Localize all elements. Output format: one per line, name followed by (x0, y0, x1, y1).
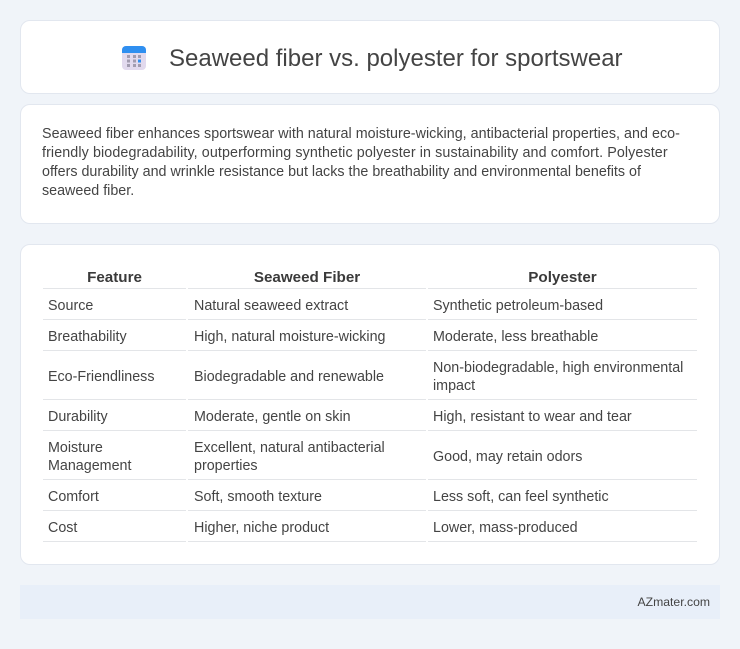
comparison table: Seaweed Fiber (254, 269, 360, 286)
comparison table: Biodegradable and renewable (194, 369, 384, 385)
comparison table (43, 269, 697, 542)
comparison table: Natural seaweed extract (194, 298, 348, 314)
comparison table: Moderate, gentle on skin (194, 409, 351, 425)
comparison table: properties (194, 458, 258, 474)
comparison table: Eco-Friendliness (48, 369, 154, 385)
comparison table: Management (48, 458, 131, 474)
summary text: seaweed fiber. (42, 183, 134, 199)
panel: title card (20, 20, 720, 94)
comparison table: Higher, niche product (194, 520, 329, 536)
comparison table: Feature (87, 269, 142, 286)
summary text (42, 126, 680, 199)
comparison table: High, resistant to wear and tear (433, 409, 632, 425)
comparison table: Comfort (48, 489, 99, 505)
comparison table: Good, may retain odors (433, 449, 582, 465)
comparison table: High, natural moisture-wicking (194, 329, 386, 345)
comparison table: Less soft, can feel synthetic (433, 489, 609, 505)
comparison table: Polyester (528, 269, 597, 286)
summary text: friendly biodegradability, outperforming synthetic polyester in sustainability and comfort. Polyester (42, 145, 668, 161)
summary text: Seaweed fiber enhances sportswear with natural moisture-wicking, antibacterial properties, and eco- (42, 126, 680, 142)
comparison table: Durability (48, 409, 108, 425)
panel: summary (20, 104, 720, 224)
comparison table: Non-biodegradable, high environmental (433, 360, 683, 376)
comparison table: Cost (48, 520, 77, 536)
comparison table: impact (433, 378, 475, 394)
comparison table: Moderate, less breathable (433, 329, 598, 345)
icon: calendar (122, 46, 146, 70)
comparison table: Breathability (48, 329, 127, 345)
comparison table: Source (48, 298, 93, 314)
comparison table: Lower, mass-produced (433, 520, 578, 536)
footer text: AZmater.com (638, 595, 710, 609)
comparison table: Soft, smooth texture (194, 489, 322, 505)
comparison table: Excellent, natural antibacterial (194, 440, 385, 456)
panel: comparison table (20, 244, 720, 565)
comparison table: Synthetic petroleum-based (433, 298, 603, 314)
comparison table: Moisture (48, 440, 103, 456)
footer bar (20, 585, 720, 619)
title: Seaweed fiber vs. polyester for sportswear (169, 45, 623, 72)
summary text: offers durability and wrinkle resistance but lacks the breathability and environmental benefits of (42, 164, 641, 180)
